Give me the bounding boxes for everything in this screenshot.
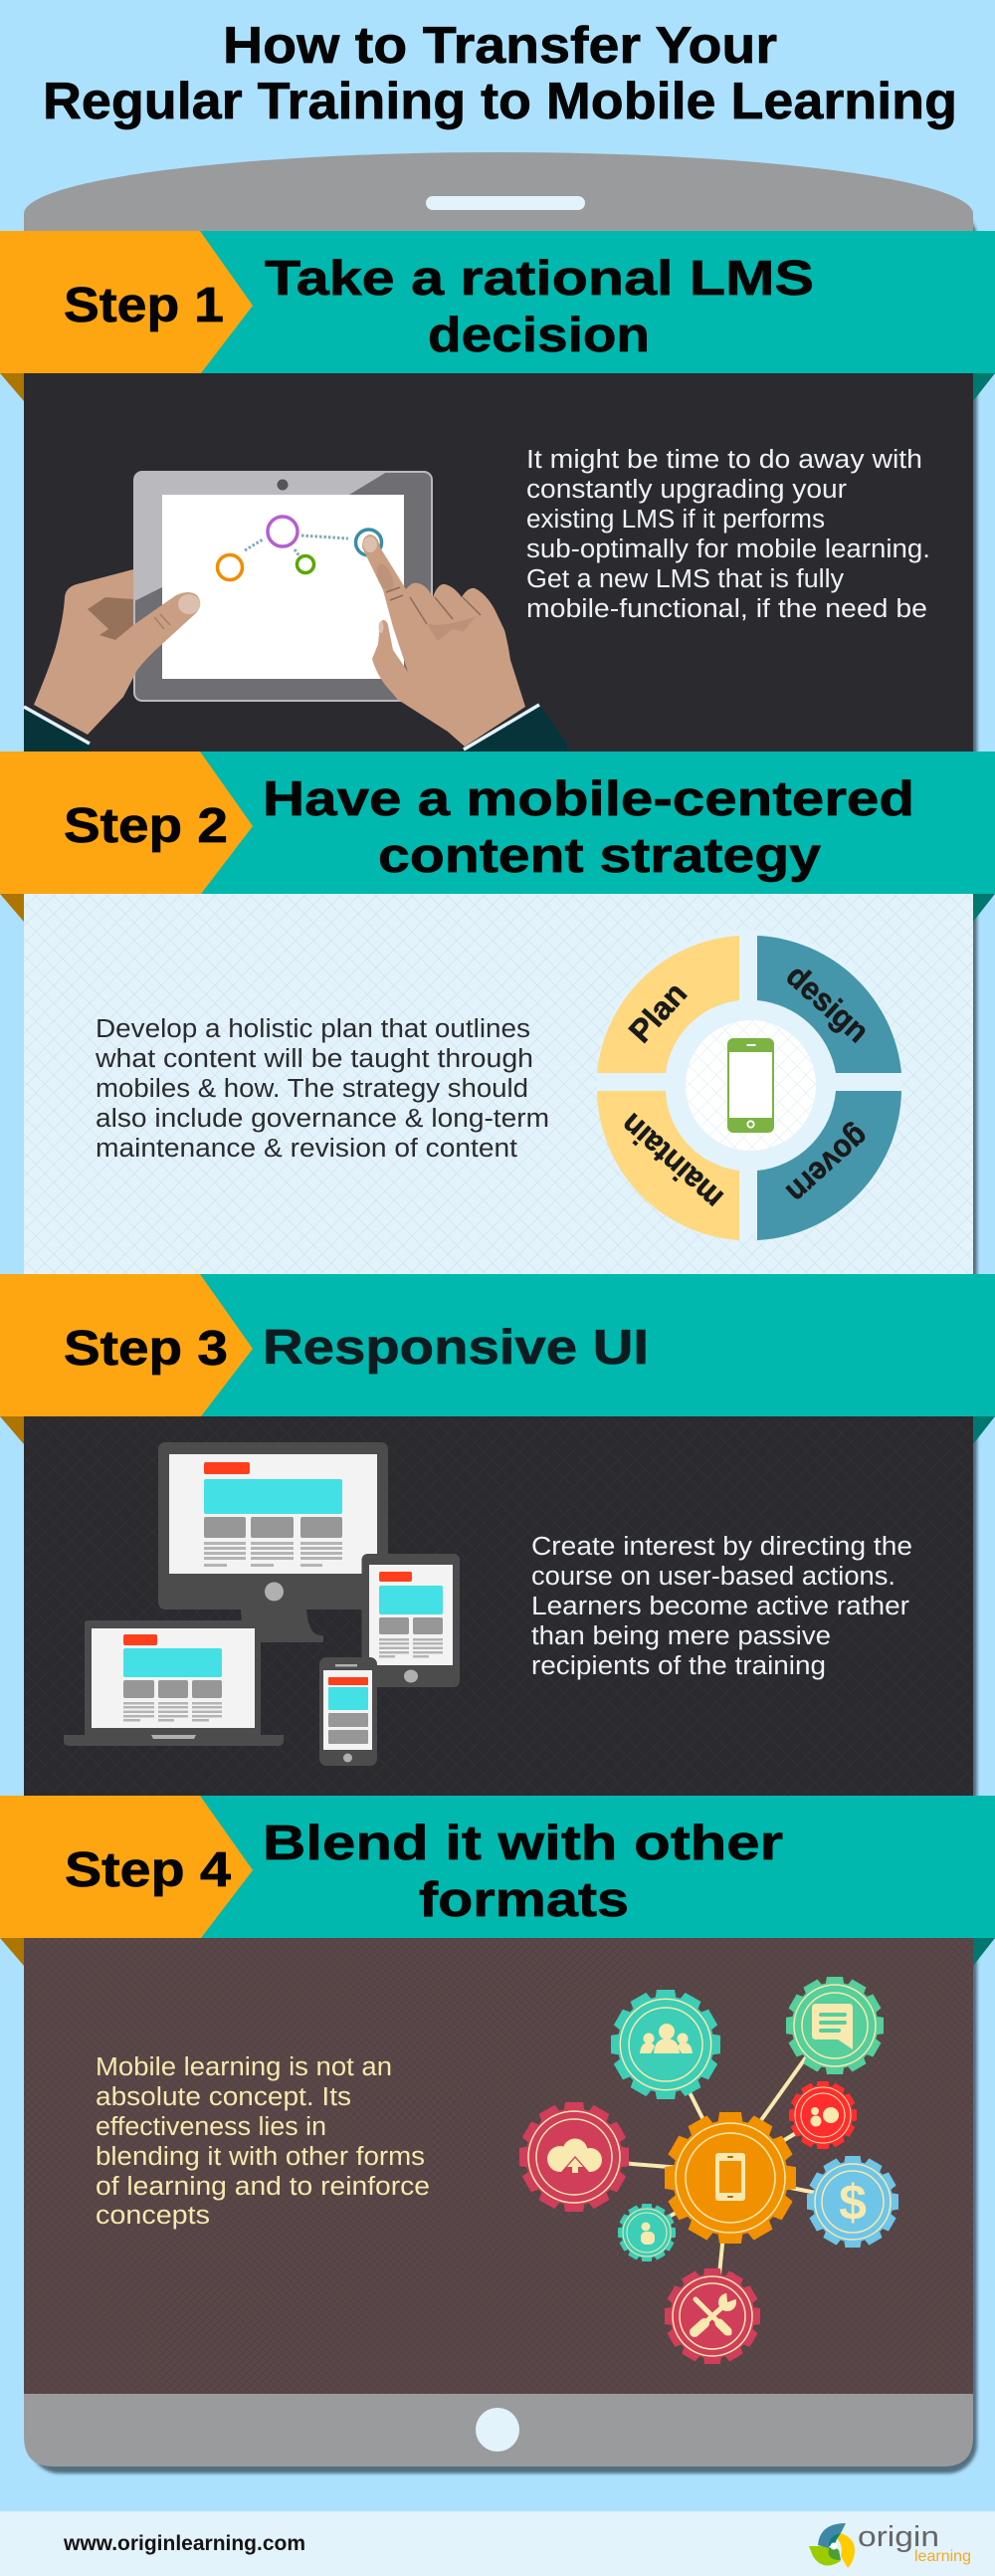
text: step 3 body	[531, 1533, 912, 1680]
text: step 2 body: mobiles & how. The strategy should	[96, 1075, 528, 1103]
diagram: content strategy wheel	[597, 930, 901, 1240]
logo: origin learning	[809, 2521, 971, 2568]
gear: chat	[786, 1977, 884, 2074]
band: step 1 header: Take a rational LMS	[265, 252, 814, 306]
segment: design	[757, 936, 901, 1073]
laptop	[64, 1620, 284, 1746]
panel: step 4 content	[24, 1938, 973, 2394]
segment: plan: Plan	[622, 975, 694, 1049]
gear: tools	[665, 2268, 760, 2364]
band: step 2 header	[0, 751, 995, 922]
segment: govern	[757, 1091, 901, 1240]
text: step 1 body: Get a new LMS that is fully	[526, 565, 844, 593]
text: step 1 body: sub-optimally for mobile learning.	[526, 536, 930, 563]
text: step 4 body: concepts	[96, 2202, 210, 2230]
segment: govern: govern	[780, 1119, 876, 1210]
text: step 2 body: Develop a holistic plan that outlines	[96, 1015, 530, 1043]
text: step 3 body: course on user-based actions.	[531, 1563, 896, 1591]
text: step 3 body: Create interest by directing the	[531, 1533, 912, 1561]
band: step 1 header: decision	[428, 309, 650, 362]
gear: dollar: $	[839, 2175, 867, 2231]
tablet	[362, 1554, 460, 1687]
segment: design: design	[780, 958, 876, 1049]
text: step 2 body: maintenance & revision of content	[96, 1135, 517, 1163]
text: step 1 body: It might be time to do away with	[526, 446, 922, 474]
band: step 4 header	[0, 1796, 995, 1966]
segment: maintain	[597, 1091, 739, 1240]
logo: origin learning: learning	[914, 2548, 971, 2565]
text: step 2 body: also include governance & long-term	[96, 1105, 549, 1133]
segment: maintain: maintain	[614, 1107, 729, 1216]
wheel backing disc	[597, 930, 901, 1234]
panel: step 3 content	[24, 1416, 973, 1796]
band: step 3 header: Responsive UI	[263, 1321, 649, 1375]
band: step 3 header: Step 3	[64, 1322, 228, 1376]
illustration: responsive devices	[64, 1442, 460, 1766]
title	[43, 17, 957, 130]
panel: step 1 content	[24, 373, 973, 751]
panel: step 2 content	[24, 894, 973, 1274]
phone top bezel with speaker	[24, 152, 973, 231]
text: step 4 body: blending it with other forms	[96, 2143, 425, 2171]
text: step 3 body: recipients of the training	[531, 1652, 826, 1680]
band: step 3 header	[0, 1274, 995, 1444]
illustration: hands holding tablet	[24, 472, 567, 751]
diagram: gear network	[519, 1977, 898, 2364]
website url: www.originlearning.com	[63, 2532, 305, 2555]
text: step 1 body: existing LMS if it performs	[526, 506, 825, 534]
connector lines	[620, 2057, 816, 2274]
gear: dollar	[807, 2156, 898, 2248]
gear: settings	[789, 2081, 857, 2149]
right hand	[362, 535, 567, 751]
hub circle	[686, 1020, 816, 1151]
text: step 4 body: effectiveness lies in	[96, 2113, 326, 2141]
gear: cloud upload	[519, 2102, 629, 2212]
band: step 1 header: Step 1	[64, 279, 224, 332]
band: step 2 header: Have a mobile-centered	[263, 772, 914, 826]
text: step 4 body: Mobile learning is not an	[96, 2053, 392, 2081]
gear: central mobile	[665, 2112, 796, 2244]
band: step 2 header: Step 2	[64, 799, 228, 853]
segment: plan	[597, 936, 739, 1073]
icon: smartphone	[727, 1038, 774, 1133]
monitor	[158, 1442, 388, 1642]
gear: touch	[618, 2204, 676, 2261]
title: Regular Training to Mobile Learning	[43, 73, 957, 130]
text: step 4 body: absolute concept. Its	[96, 2083, 351, 2111]
text: step 3 body: than being mere passive	[531, 1622, 831, 1650]
title: How to Transfer Your	[223, 17, 777, 75]
logo: origin learning: origin	[858, 2521, 939, 2553]
text: step 1 body: constantly upgrading your	[526, 476, 848, 504]
band: step 4 header: formats	[419, 1873, 629, 1927]
band: step 4 header: Step 4	[65, 1843, 231, 1897]
text: step 2 body	[95, 1015, 549, 1163]
text: step 4 body	[96, 2053, 430, 2230]
band: step 2 header: content strategy	[378, 829, 821, 883]
gear: people	[611, 1990, 720, 2099]
band: step 4 header: Blend it with other	[263, 1817, 783, 1870]
left hand	[24, 569, 200, 751]
text: step 1 body: mobile-functional, if the need be	[526, 595, 927, 623]
tablet	[134, 472, 432, 701]
phone bottom bezel with home button	[24, 2394, 973, 2467]
text: step 2 body: what content will be taught through	[95, 1045, 533, 1073]
text: step 3 body: Learners become active rather	[531, 1593, 910, 1620]
text: step 4 body: of learning and to reinforce	[96, 2173, 430, 2201]
band: step 1 header	[0, 231, 995, 401]
phone	[319, 1657, 377, 1766]
footer	[0, 2511, 995, 2576]
text: step 1 body	[526, 446, 930, 623]
